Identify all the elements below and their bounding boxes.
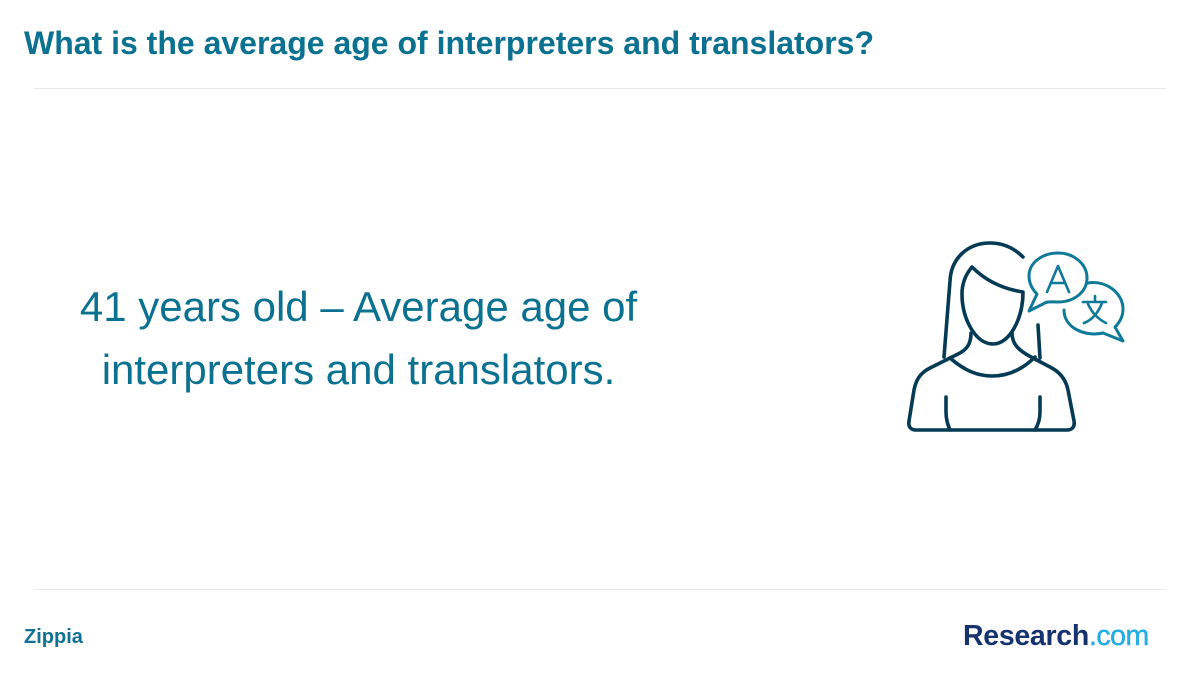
logo: Research.com: Research.com	[963, 620, 1149, 652]
title: What is the average age of interpreters and translators?	[24, 25, 874, 61]
icon: woman figure	[909, 243, 1074, 430]
source label: Zippia: Zippia	[24, 626, 83, 648]
icon: speech bubble A	[1029, 253, 1087, 311]
statistic text: 41 years old – Average age of	[80, 283, 637, 330]
icon: speech bubble character	[1064, 283, 1123, 341]
statistic text: interpreters and translators.	[102, 346, 615, 393]
statistic text	[80, 283, 638, 393]
icon: woman with translation speech bubbles	[907, 241, 1125, 432]
